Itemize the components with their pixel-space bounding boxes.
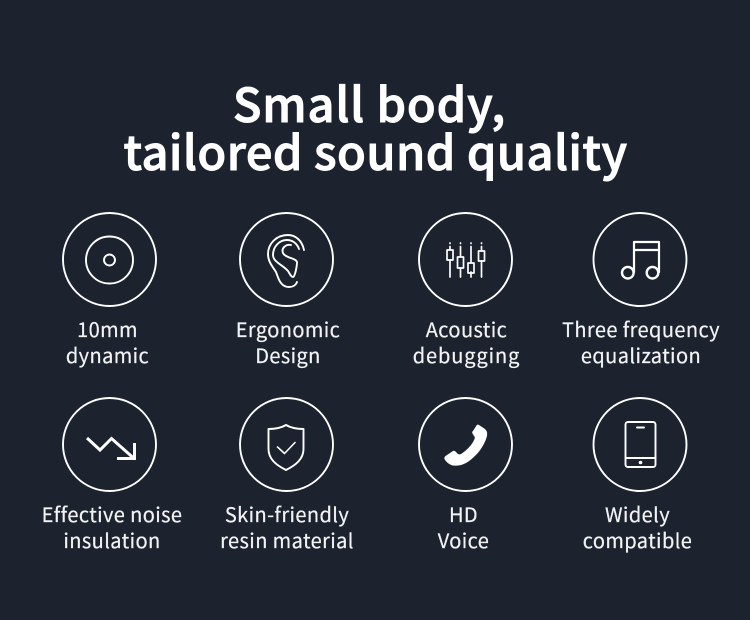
icon: shield with check [240, 398, 333, 491]
label: Three frequency equalization: equalization [581, 340, 701, 369]
icon: downward trend arrow [63, 398, 156, 491]
title [124, 67, 627, 184]
feature: Ergonomic Design [236, 213, 340, 369]
label: Effective noise insulation: insulation [63, 525, 161, 554]
label: Skin-friendly resin material: resin material [220, 525, 354, 554]
label: Acoustic debugging: debugging [413, 340, 520, 369]
feature: HD Voice [419, 398, 512, 554]
label: Effective noise insulation: Effective noise [42, 499, 182, 528]
icon: telephone handset [419, 398, 512, 491]
feature: 10mm dynamic [63, 213, 156, 369]
icon: music note [594, 213, 686, 306]
label: Skin-friendly resin material [220, 499, 354, 554]
label: Ergonomic Design [236, 314, 340, 369]
label: Widely compatible: compatible [583, 525, 692, 554]
label: HD Voice [438, 499, 489, 554]
label: Acoustic debugging [413, 314, 520, 369]
feature: Skin-friendly resin material [220, 398, 354, 554]
feature: Three frequency equalization [562, 213, 720, 369]
feature: Widely compatible [583, 398, 692, 554]
icon: speaker driver [63, 213, 156, 306]
label: Ergonomic Design: Ergonomic [236, 314, 340, 343]
label: Three frequency equalization [562, 314, 720, 369]
label: 10mm dynamic [66, 314, 149, 369]
label: Widely compatible: Widely [605, 499, 670, 528]
label: Effective noise insulation [42, 499, 182, 554]
label: 10mm dynamic: 10mm [77, 314, 138, 343]
icon: ear [240, 213, 333, 306]
label: HD Voice: Voice [438, 525, 489, 554]
title: tailored sound quality [124, 115, 627, 184]
label: Skin-friendly resin material: Skin-friendly [225, 499, 349, 528]
icon: smartphone [594, 398, 686, 491]
title: Small body, [233, 67, 506, 136]
label: Three frequency equalization: Three frequency [562, 314, 720, 343]
label: Widely compatible [583, 499, 692, 554]
feature: Acoustic debugging [413, 213, 520, 369]
icon: sliders [419, 213, 512, 306]
label: HD Voice: HD [449, 499, 478, 528]
label: Ergonomic Design: Design [255, 340, 321, 369]
label: 10mm dynamic: dynamic [66, 340, 149, 369]
feature: Effective noise insulation [42, 398, 182, 554]
label: Acoustic debugging: Acoustic [426, 314, 507, 343]
